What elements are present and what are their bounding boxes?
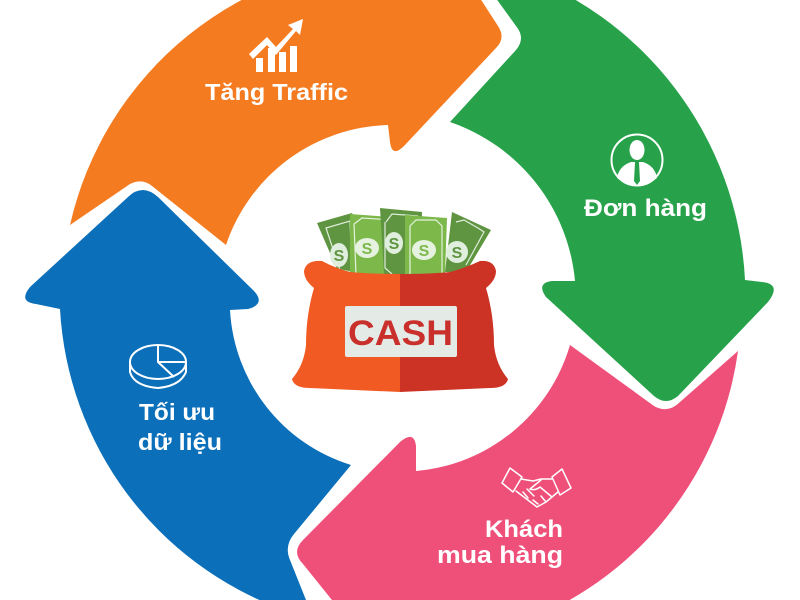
heading: mua hàng: mua hàng xyxy=(437,542,563,569)
label: CASH: CASH xyxy=(348,314,453,353)
icon: growth chart xyxy=(249,19,303,72)
heading: Đơn hàng: Đơn hàng xyxy=(584,195,707,222)
bag right half xyxy=(400,261,508,392)
heading: Tối ưu: Tối ưu xyxy=(139,399,215,425)
banknotes xyxy=(317,208,491,276)
label plate xyxy=(345,306,457,357)
banknotes: S xyxy=(389,236,400,253)
banknotes: S xyxy=(362,241,373,258)
heading: Tăng Traffic: Tăng Traffic xyxy=(205,79,348,105)
bag left half xyxy=(292,261,400,392)
banknotes: S xyxy=(452,245,463,262)
icon: pie chart xyxy=(130,345,186,388)
icon: money bag xyxy=(292,208,508,392)
icon: businessman xyxy=(612,134,662,186)
arrow: orange Tăng Traffic xyxy=(70,0,502,245)
arrow: pink Khách mua hàng xyxy=(297,345,738,600)
icon: handshake xyxy=(502,468,571,507)
banknotes: S xyxy=(334,248,345,265)
arrow: blue Tối ưu dữ liệu xyxy=(25,190,351,600)
banknotes: S xyxy=(419,243,430,260)
heading: Khách: Khách xyxy=(485,516,563,543)
heading: dữ liệu: dữ liệu xyxy=(138,429,222,455)
arrow: green Đơn hàng xyxy=(450,0,774,401)
